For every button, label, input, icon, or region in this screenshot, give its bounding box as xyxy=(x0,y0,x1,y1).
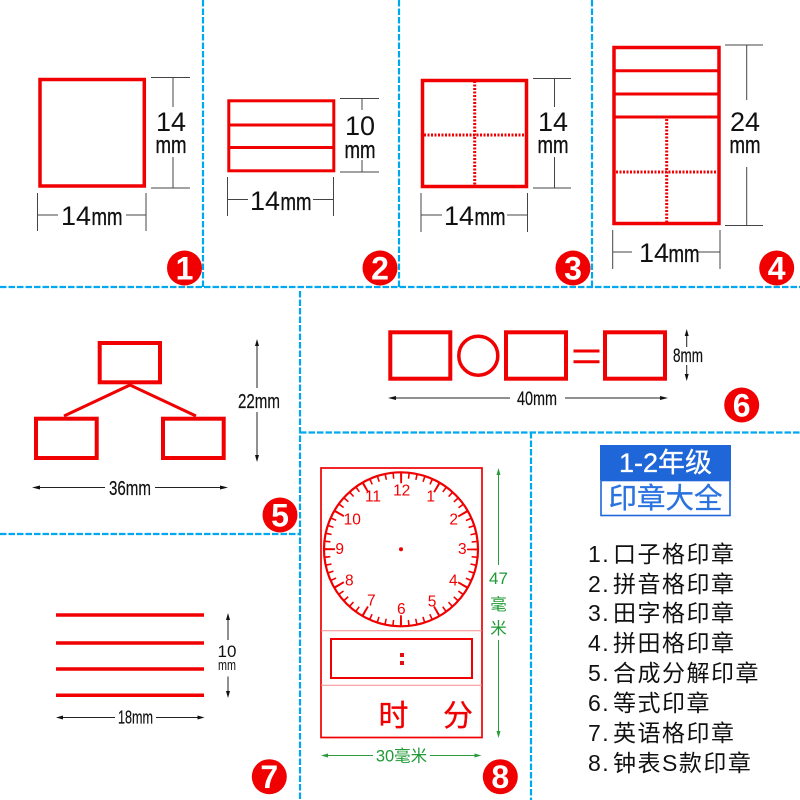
dimension: height 22mm: 22mm xyxy=(238,391,280,413)
dimension: width 14mm: mm xyxy=(668,241,700,268)
clock face: 2 xyxy=(449,512,458,528)
clock face: 3 xyxy=(458,541,467,558)
dimension: width 18mm xyxy=(56,708,204,728)
dimension: height 10mm xyxy=(340,98,379,172)
dimension: width 14mm: 14 xyxy=(639,238,669,268)
stamp 1 outline xyxy=(40,80,144,186)
badge 8 xyxy=(483,759,518,795)
dimension: height 14mm xyxy=(151,78,190,188)
dimension: width 18mm: 18mm xyxy=(118,708,153,728)
dimension: height 14mm: mm xyxy=(538,132,568,159)
dimension: height 14mm: 14 xyxy=(538,107,568,137)
dimension: width 14mm: 14 xyxy=(250,186,280,216)
badge 3: 3 xyxy=(564,250,582,286)
badge 4: 4 xyxy=(768,250,786,286)
panel 7: English lines stamp xyxy=(56,613,236,728)
stamp 5 shapes xyxy=(36,343,224,458)
dimension: width 36mm xyxy=(32,478,228,500)
stamp list: 6. xyxy=(588,690,610,716)
clock face: 6 xyxy=(397,601,406,618)
title: grade: 1-2年级 xyxy=(619,448,712,478)
badge 2 xyxy=(362,250,398,286)
panel 3: tianzi grid stamp xyxy=(421,78,571,232)
stamp list: 1. xyxy=(588,541,610,567)
dimension: width 36mm: 36mm xyxy=(109,478,151,500)
stamp 7 lines xyxy=(56,615,204,695)
stamp 2 outline xyxy=(228,101,334,171)
stamp list: 口子格印章 xyxy=(613,541,736,567)
stamp list: 合成分解印章 xyxy=(613,660,760,686)
dimension: height 47mm xyxy=(489,468,508,738)
dimension: height 24mm xyxy=(725,45,763,226)
stamp list: 4. xyxy=(588,630,610,656)
stamp list: 英语格印章 xyxy=(613,720,736,746)
clock face xyxy=(324,472,478,626)
dimension: width 14mm xyxy=(613,230,720,269)
dimension: width 14mm xyxy=(421,193,528,232)
panel 8: clock stamp xyxy=(321,468,508,766)
clock face: 5 xyxy=(428,594,436,610)
dimension: height 8mm: 8mm xyxy=(673,346,703,367)
stamp 4 outline xyxy=(613,48,720,224)
dimension: height 14mm: mm xyxy=(156,132,186,159)
stamp list: 3. xyxy=(588,600,610,626)
dimension: width 40mm: 40mm xyxy=(517,389,557,410)
hour minute labels: 分 xyxy=(443,700,473,733)
stamp 3 outline xyxy=(422,80,526,186)
stamp list: 拼田格印章 xyxy=(613,630,736,656)
title block xyxy=(600,445,731,516)
dimension: width 14mm: mm xyxy=(92,204,122,231)
stamp list: 7. xyxy=(588,720,610,746)
stamp list: 钟表S款印章 xyxy=(613,750,752,776)
dimension: width 30mm: 30毫米 xyxy=(376,746,427,766)
stamp list: 拼音格印章 xyxy=(613,571,736,597)
clock face: 11 xyxy=(365,488,381,506)
stamp list: 等式印章 xyxy=(613,690,711,716)
dimension: width 14mm: mm xyxy=(474,204,506,231)
hour minute labels: 时 xyxy=(378,700,408,733)
badge 3 xyxy=(556,250,590,286)
badge 8: 8 xyxy=(491,759,509,795)
dimension: height 47mm: 米 xyxy=(490,619,507,638)
panel 4: pinyin plus tianzi stamp xyxy=(613,45,763,269)
clock face: 9 xyxy=(335,541,344,558)
dimension: height 22mm xyxy=(238,339,280,462)
badge 5: 5 xyxy=(271,498,289,534)
stamp list: 5. xyxy=(588,660,610,686)
stamp 8 frame xyxy=(321,468,482,738)
digital time box xyxy=(321,631,482,685)
panel 1: square stamp xyxy=(38,78,190,231)
dimension: height 14mm: 14 xyxy=(156,107,186,137)
stamp list: 8. xyxy=(588,750,610,776)
dimension: height 10mm: mm xyxy=(218,657,236,674)
dimension: height 47mm: 47 xyxy=(489,569,508,588)
dimension: height 14mm xyxy=(533,78,571,188)
panel 6: equation stamp xyxy=(388,329,703,410)
clock face: 12 xyxy=(393,482,410,500)
stamp 6 shapes xyxy=(390,332,665,379)
badge 6: 6 xyxy=(733,388,751,424)
dimension: width 30mm xyxy=(321,746,482,766)
badge 7 xyxy=(252,759,287,795)
badge 1 xyxy=(167,250,202,286)
dimension: width 14mm xyxy=(228,177,334,216)
clock face: 7 xyxy=(367,592,376,610)
panel 2: pinyin stamp xyxy=(228,98,379,216)
dimension: height 24mm: 24 xyxy=(730,107,760,137)
dimension: height 47mm: 毫 xyxy=(490,595,507,614)
dimension: width 14mm xyxy=(38,193,146,231)
stamp list xyxy=(588,541,760,776)
dimension: width 40mm xyxy=(388,389,668,410)
badge 2: 2 xyxy=(371,250,389,286)
dimension: width 14mm: 14 xyxy=(61,201,91,231)
badge 7: 7 xyxy=(260,759,278,795)
dimension: height 10mm xyxy=(218,613,236,698)
stamp list: 田字格印章 xyxy=(613,600,736,626)
clock face: 10 xyxy=(344,512,361,528)
dimension: height 24mm: mm xyxy=(730,132,760,159)
hour minute labels xyxy=(378,700,473,733)
badge 4 xyxy=(759,250,794,286)
panel 5: composition stamp xyxy=(32,339,280,500)
dimension: height 10mm: 10 xyxy=(345,111,375,141)
badge 5 xyxy=(262,498,298,534)
badge 1: 1 xyxy=(176,250,193,286)
dimension: width 14mm: mm xyxy=(280,189,312,216)
badge 6 xyxy=(724,388,759,424)
clock face: 4 xyxy=(449,572,458,590)
dimension: width 14mm: 14 xyxy=(444,201,474,231)
clock face: 1 xyxy=(426,488,435,506)
clock face: 8 xyxy=(345,572,354,590)
dimension: height 10mm: 10 xyxy=(218,642,236,661)
dimension: height 10mm: mm xyxy=(344,137,376,164)
title: stamp collection: 印章大全 xyxy=(608,483,723,515)
dimension: height 8mm xyxy=(673,329,703,381)
stamp list: 2. xyxy=(588,571,610,597)
